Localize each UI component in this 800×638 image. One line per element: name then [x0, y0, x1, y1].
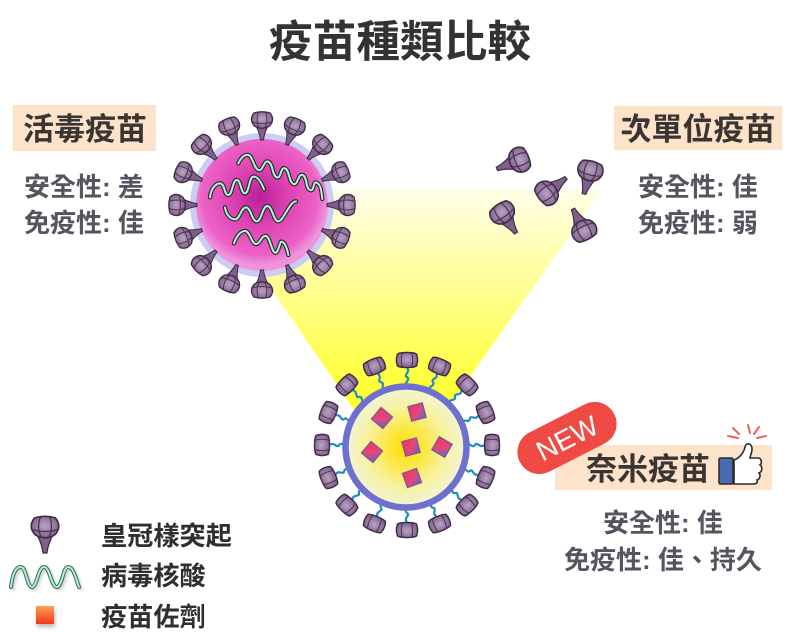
icon: adjuvant	[36, 606, 55, 627]
safety and immunity text	[638, 172, 758, 238]
virus-like particle: nano vaccine	[314, 352, 500, 538]
yellow light cone	[203, 190, 602, 447]
icon: thumbs up	[719, 425, 766, 484]
safety and immunity text: 安全性: 佳	[603, 508, 723, 538]
label background	[13, 105, 156, 151]
safety and immunity text: 安全性: 差	[24, 172, 144, 202]
panel: nano vaccine	[510, 394, 772, 575]
legend	[11, 516, 232, 632]
viral RNA strands	[210, 155, 322, 255]
icon: spike protein	[31, 516, 59, 553]
safety and immunity text: 安全性: 佳	[638, 172, 758, 202]
title: 疫苗種類比較	[269, 18, 531, 67]
label background	[614, 106, 782, 150]
membrane	[190, 133, 334, 277]
legend label: adjuvant: 疫苗佐劑	[101, 602, 206, 632]
linkers and spike heads	[314, 352, 500, 538]
safety and immunity text: 免疫性: 弱	[638, 208, 758, 238]
safety and immunity text	[24, 172, 144, 238]
heading: 活毒疫苗	[23, 112, 147, 147]
new badge	[510, 394, 624, 482]
safety and immunity text: 免疫性: 佳	[24, 208, 144, 238]
spike proteins ring	[169, 112, 355, 298]
panel: live vaccine	[13, 105, 156, 238]
safety and immunity text	[564, 508, 762, 575]
adjuvant squares	[361, 403, 452, 488]
particle shell	[346, 386, 466, 508]
virus body	[196, 139, 328, 271]
heading: 奈米疫苗	[586, 452, 710, 487]
icon: viral RNA	[11, 567, 81, 589]
detached spike proteins: subunit vaccine	[487, 145, 605, 245]
heading: 次單位疫苗	[620, 112, 776, 147]
safety and immunity text: 免疫性: 佳、持久	[564, 545, 762, 575]
legend label: spike: 皇冠樣突起	[101, 521, 232, 551]
legend label: RNA: 病毒核酸	[101, 561, 206, 591]
new badge: NEW	[531, 410, 604, 467]
panel: subunit vaccine	[614, 106, 782, 238]
virus: live vaccine	[169, 112, 355, 298]
label background	[555, 445, 772, 490]
